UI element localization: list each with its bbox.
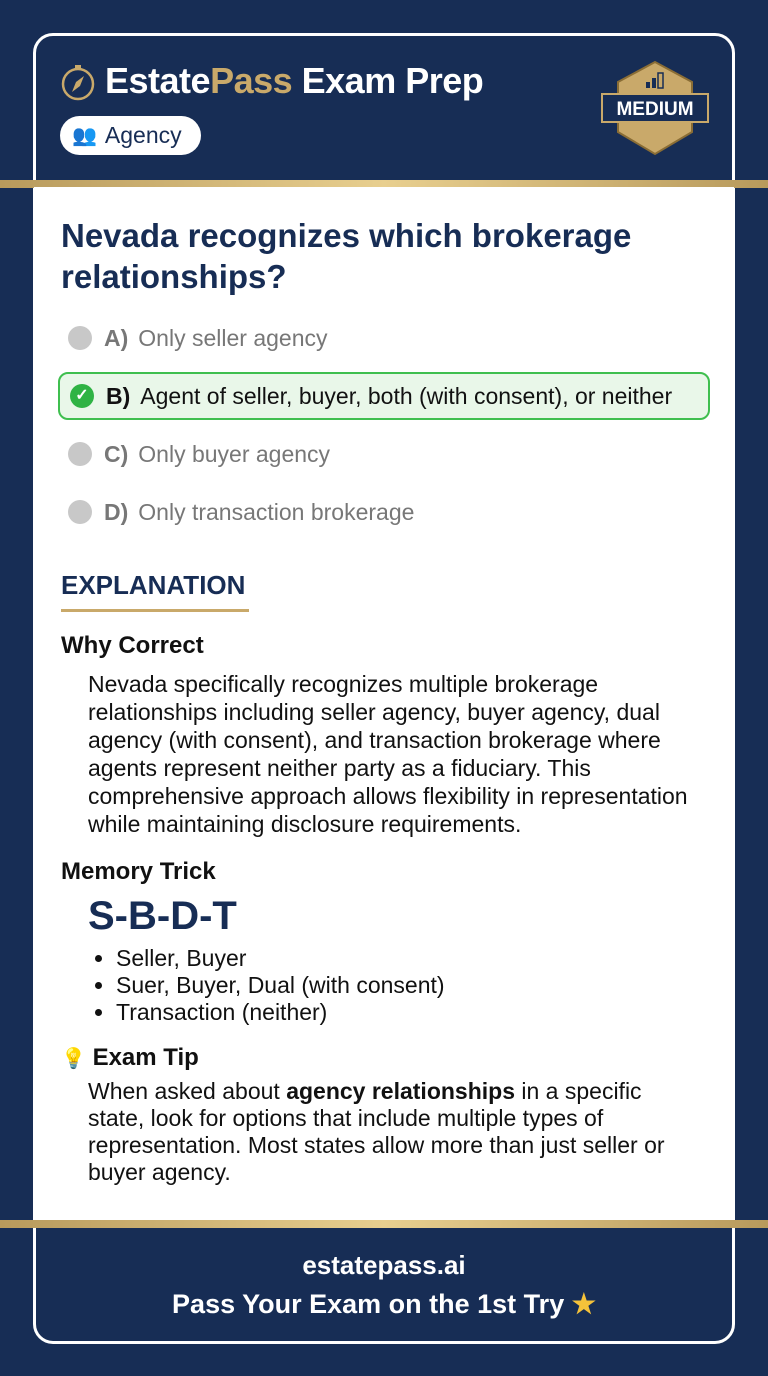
tag: Agency: 👥 xyxy=(72,125,97,147)
memory trick: Seller, Buyer xyxy=(116,945,246,971)
icon: compass xyxy=(62,65,94,100)
option A: Only seller agency xyxy=(138,324,327,350)
question: Nevada recognizes which brokerage relationships? xyxy=(61,217,631,295)
option C: C) xyxy=(104,440,128,466)
memory trick: Transaction (neither) xyxy=(116,999,327,1025)
header xyxy=(60,60,709,155)
footer: Pass Your Exam on the 1st Try ★ xyxy=(172,1289,596,1319)
exam tip: When asked about agency relationships in a specific state, look for options that include multiple types of representation. Most states allow more than just seller or buyer agency. xyxy=(88,1078,665,1185)
option B correct xyxy=(58,372,710,420)
why correct: Nevada specifically recognizes multiple brokerage relationships including seller agency, buyer agency, dual agency (with consent), and transaction brokerage where agents represent neither party as a fiduciary. This comprehensive approach allows flexibility in representation while maintaining disclosure requirements. xyxy=(88,671,688,837)
tag: Agency xyxy=(60,116,201,155)
exam tip: 💡 Exam Tip xyxy=(61,1044,199,1071)
heading: explanation: EXPLANATION xyxy=(61,570,245,600)
why correct: Why Correct xyxy=(61,632,204,659)
panel: content xyxy=(34,187,734,1220)
memory trick xyxy=(61,858,445,1025)
memory trick: S-B-D-T xyxy=(88,894,237,938)
option A: A) xyxy=(104,324,128,350)
badge: medium: MEDIUM xyxy=(616,99,694,120)
option B correct: ✓ xyxy=(75,387,89,404)
option B correct: Agent of seller, buyer, both (with consent), or neither xyxy=(140,382,672,408)
option B correct: B) xyxy=(106,382,130,408)
badge: medium xyxy=(601,61,709,155)
memory trick: Memory Trick xyxy=(61,858,216,885)
tag: Agency: Agency xyxy=(105,122,182,148)
title: EstatePass Exam Prep xyxy=(105,60,483,101)
option D: Only transaction brokerage xyxy=(138,498,414,524)
footer xyxy=(172,1250,596,1319)
option D: D) xyxy=(104,498,128,524)
footer: estatepass.ai xyxy=(302,1250,466,1280)
option C: Only buyer agency xyxy=(138,440,330,466)
memory trick: Suer, Buyer, Dual (with consent) xyxy=(116,972,445,998)
